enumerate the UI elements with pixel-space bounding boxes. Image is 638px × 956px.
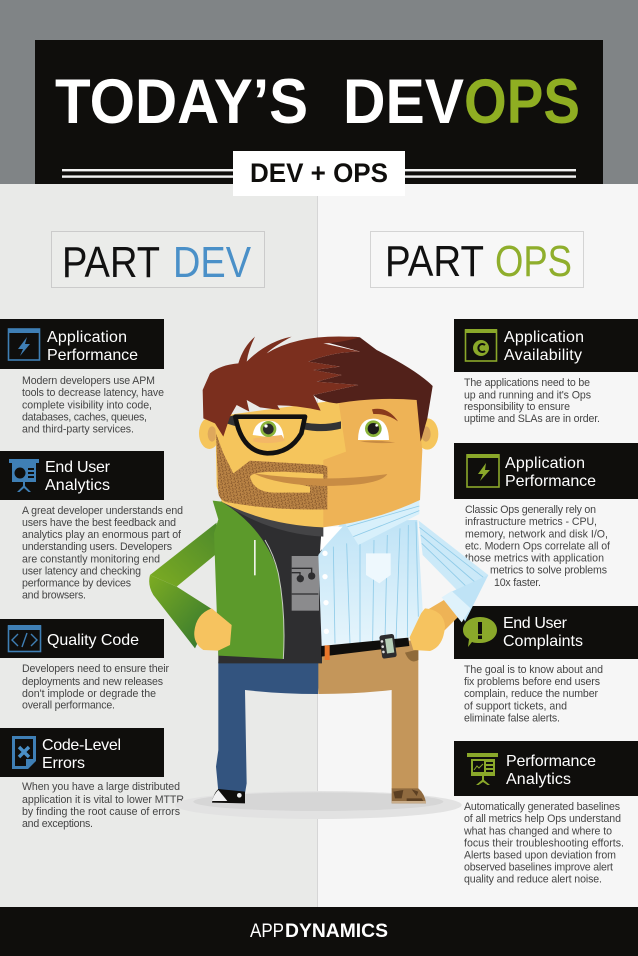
body text: application it is vital to lower MTTR — [22, 794, 184, 806]
body text: quality and reduce alert noise. — [464, 874, 602, 886]
right shoe — [392, 788, 426, 803]
body text: overall performance. — [22, 700, 115, 712]
body text: complain, reduce the number — [464, 688, 598, 700]
background: left dev half — [0, 184, 318, 908]
body text — [464, 664, 603, 724]
heading text — [505, 455, 596, 490]
face right — [323, 397, 422, 527]
upper lip — [250, 472, 323, 481]
heading text: Application — [504, 329, 584, 346]
heading text — [506, 753, 596, 788]
icon: document with x — [12, 736, 36, 769]
title: OPS — [464, 67, 580, 137]
icon: code window — [8, 625, 41, 652]
heading text: Application — [47, 329, 127, 346]
logo: appdynamics: DYNAMICS — [285, 921, 388, 942]
right fist — [407, 608, 445, 651]
body text: eliminate false alerts. — [464, 712, 560, 724]
heading text — [504, 329, 584, 364]
character: half dev half ops — [149, 336, 488, 819]
background: grey textured top — [0, 0, 638, 184]
heading: part dev: DEV — [173, 238, 252, 287]
body text: understanding users. Developers — [22, 541, 172, 553]
right eye — [358, 419, 395, 443]
pager — [379, 634, 397, 659]
right sleeve upper — [419, 521, 488, 603]
panel: dev quality code — [0, 619, 169, 712]
body text: The applications need to be — [464, 377, 590, 389]
heading text: Complaints — [503, 633, 583, 650]
heading text: Performance — [505, 473, 596, 490]
body text: 10x faster. — [494, 577, 541, 589]
body text: A great developer understands end — [22, 505, 183, 517]
body text — [22, 505, 183, 602]
body text: by finding the root cause of errors — [22, 806, 180, 818]
body text: responsibility to ensure — [464, 401, 570, 413]
body text: observed baselines improve alert — [464, 862, 613, 874]
body text: deployments and new releases — [22, 676, 163, 688]
right forearm — [426, 599, 460, 632]
body text: Alerts based upon deviation from — [464, 850, 616, 862]
heading text: Code-Level — [42, 737, 121, 754]
body text: metrics to solve problems — [490, 564, 607, 576]
body text: databases, caches, queues, — [22, 412, 147, 424]
body text: up and running and it's Ops — [464, 390, 591, 402]
body text: performance by devices — [22, 578, 131, 590]
right ear — [416, 418, 438, 450]
icon: window with refresh — [465, 329, 497, 361]
body text: etc. Modern Ops correlate all of — [465, 540, 610, 552]
left eye — [253, 421, 285, 443]
heading text — [45, 459, 111, 494]
heading: part ops: PART — [385, 237, 484, 286]
body text — [464, 377, 600, 425]
left ear — [199, 418, 220, 449]
heading: part ops: OPS — [495, 237, 572, 286]
heading text: End User — [45, 459, 111, 476]
heading text — [42, 737, 121, 772]
heading text: Availability — [504, 347, 582, 364]
heading: part dev: PART — [62, 238, 160, 287]
body text — [463, 801, 624, 886]
glasses — [215, 415, 341, 453]
icon: chart presentation board — [467, 753, 498, 785]
body text — [22, 375, 164, 436]
body text: focus their troubleshooting efforts. — [464, 838, 624, 850]
subtitle badge: dev + ops: DEV + OPS — [250, 158, 388, 188]
body text: uptime and SLAs are in order. — [464, 413, 600, 425]
jacket sleeve upper — [150, 523, 217, 587]
background: right ops half — [318, 184, 638, 908]
belt — [321, 638, 409, 657]
panel: dev end user analytics — [0, 451, 183, 602]
light hair: dev side — [203, 336, 360, 437]
body text: what has changed and where to — [463, 826, 612, 838]
body text: and exceptions. — [22, 818, 93, 830]
t-shirt graphic — [292, 556, 319, 611]
face left — [215, 400, 346, 527]
body text: complete visibility into code, — [22, 400, 152, 412]
heading text: Analytics — [506, 771, 571, 788]
jacket body — [213, 501, 284, 659]
body text: don't implode or degrade the — [22, 688, 156, 700]
dark hair: ops side — [308, 337, 433, 442]
panel: dev code-level errors — [0, 728, 184, 830]
body text: Classic Ops generally rely on — [465, 504, 596, 516]
ground shadow — [175, 791, 462, 819]
title: DEV — [343, 67, 464, 137]
jeans leg — [216, 662, 321, 793]
subtitle badge: dev + ops — [233, 151, 405, 196]
body text: When you have a large distributed — [22, 781, 180, 793]
heading text: Errors — [42, 755, 85, 772]
shirt — [318, 499, 423, 646]
body text: Automatically generated baselines — [464, 801, 620, 813]
body text: and browsers. — [22, 590, 86, 602]
panel: ops performance analytics — [454, 741, 638, 886]
left sneaker — [212, 789, 245, 803]
heading text: Performance — [47, 347, 138, 364]
right eyebrow — [372, 409, 398, 421]
body text: memory, network and disk I/O, — [465, 528, 608, 540]
heading text: End User — [503, 615, 568, 632]
body text: user latency and checking — [22, 566, 141, 578]
t-shirt — [218, 500, 322, 663]
panel: ops application performance — [454, 443, 638, 589]
body text: infrastructure metrics - CPU, — [465, 516, 597, 528]
heading text — [47, 329, 138, 364]
title — [55, 67, 580, 137]
left fist — [194, 608, 232, 651]
body text: Modern developers use APM — [22, 375, 155, 387]
lower lip — [250, 475, 310, 493]
title: TODAY’S — [55, 67, 308, 137]
body text: users have the best feedback and — [22, 517, 176, 529]
heading: part dev — [52, 232, 264, 288]
heading text — [503, 615, 583, 650]
icon: window with bolt — [8, 329, 40, 360]
heading text: Quality Code — [47, 632, 139, 649]
heading text: Analytics — [45, 477, 110, 494]
body text: The goal is to know about and — [464, 664, 603, 676]
jacket sleeve lower — [149, 575, 213, 648]
heading: part ops — [370, 232, 584, 288]
belt strap — [325, 645, 330, 660]
body text: those metrics with application — [465, 552, 604, 564]
icon: alert speech bubble — [463, 617, 497, 647]
body — [149, 499, 488, 819]
body text: of all metrics help Ops understand — [464, 813, 621, 825]
body text: are constantly monitoring end — [22, 554, 160, 566]
body text: tools to decrease latency, have — [22, 387, 164, 399]
icon: presentation board — [9, 459, 39, 492]
head — [199, 336, 438, 537]
body text: Developers need to ensure their — [22, 663, 169, 675]
panel: ops end user complaints — [454, 606, 638, 724]
header banner — [35, 40, 603, 184]
footer bar — [0, 907, 638, 956]
panel: dev application performance — [0, 319, 164, 436]
panel: ops application availability — [454, 319, 638, 425]
khaki leg — [318, 640, 418, 789]
logo: appdynamics: APP — [250, 921, 284, 942]
body text — [22, 781, 184, 830]
body text — [22, 663, 169, 712]
heading text: Application — [505, 455, 585, 472]
right cuff — [442, 575, 488, 622]
beard — [216, 433, 327, 510]
body text: fix problems before end users — [464, 676, 600, 688]
body text: and third-party services. — [22, 424, 134, 436]
heading text: Performance — [506, 753, 596, 770]
mouth — [253, 473, 387, 486]
body text: of support tickets, and — [464, 700, 567, 712]
collar shadow — [222, 497, 323, 537]
body text: analytics play an enormous part of — [22, 529, 181, 541]
icon: window with bolt — [466, 454, 500, 487]
body text — [465, 504, 610, 589]
